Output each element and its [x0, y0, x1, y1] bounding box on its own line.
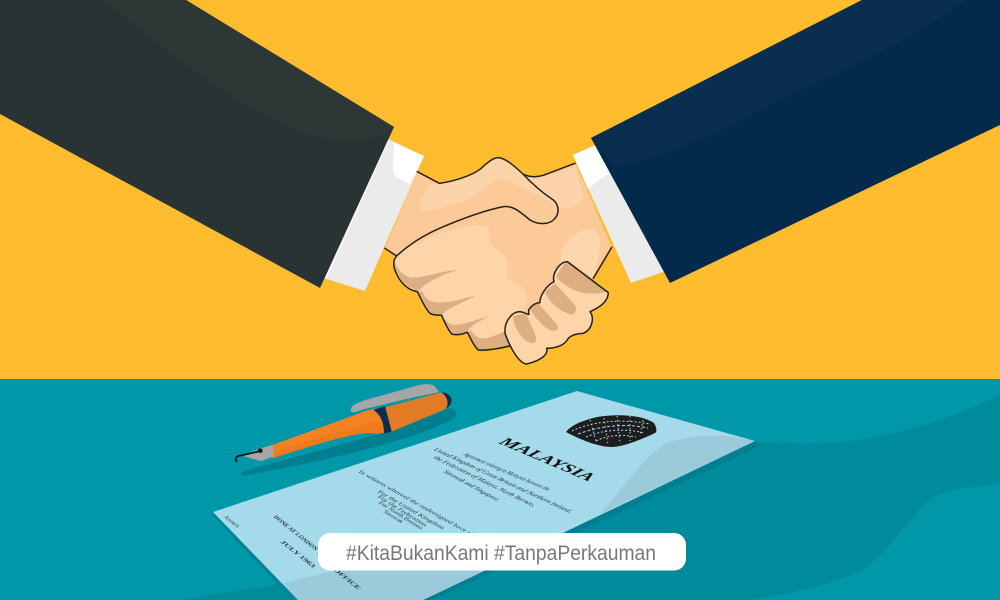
hand highlights — [420, 158, 600, 278]
document — [213, 391, 755, 600]
teal table — [0, 379, 1000, 600]
signatories text: In witness whereof the undersigned have signed — [357, 469, 488, 544]
handshake — [385, 158, 612, 364]
signatories text: For North Borneo — [377, 500, 425, 531]
agreement text: Sarawak and Singapore. — [442, 469, 503, 503]
pen cap band — [373, 406, 392, 433]
agreement text: United Kingdom of Great Britain and Northern Ireland, — [432, 447, 575, 514]
agreement text: Agreement relating to Malaysia between the — [461, 452, 553, 492]
signatories text: For the Federation — [376, 494, 429, 528]
document fold shading — [600, 436, 755, 514]
signatories text: Annex — [222, 514, 242, 529]
pen shadow — [241, 408, 456, 475]
gripping fingers — [505, 262, 608, 364]
emblem — [566, 415, 656, 447]
finger shadows — [513, 262, 607, 343]
left sleeve cuff — [320, 135, 424, 291]
yellow background — [0, 0, 1000, 379]
pen nib — [243, 445, 274, 461]
pen clip — [351, 384, 439, 412]
pen barrel — [271, 409, 385, 459]
hand outlines — [385, 158, 612, 364]
hashtag pill — [318, 533, 686, 570]
document heading: MALAYSIA — [494, 434, 599, 484]
signatories text: OFFICE — [332, 567, 363, 591]
signatories text: For the United Kingdom — [376, 489, 447, 531]
agreement text: the Federation of Malaya, North Borneo, — [432, 455, 538, 508]
fountain pen with shadow — [236, 384, 456, 475]
front hand palm — [394, 205, 563, 350]
hashtag pill: #KitaBukanKami #TanpaPerkauman — [346, 542, 656, 565]
document shadow — [212, 441, 759, 600]
finger creases — [394, 260, 510, 350]
signatories text: DONE AT LONDON THIS — [272, 514, 332, 561]
right sleeve cuff — [573, 143, 675, 283]
left dark suit sleeve — [0, 0, 394, 288]
signatories text: Sarawak — [382, 509, 406, 524]
right navy suit sleeve — [591, 0, 1000, 283]
front hand light knuckles — [394, 225, 527, 350]
signatories text — [222, 469, 488, 591]
back hand — [385, 158, 612, 317]
pen cap — [385, 393, 451, 432]
signatories text: JULY 1963 — [279, 539, 318, 569]
